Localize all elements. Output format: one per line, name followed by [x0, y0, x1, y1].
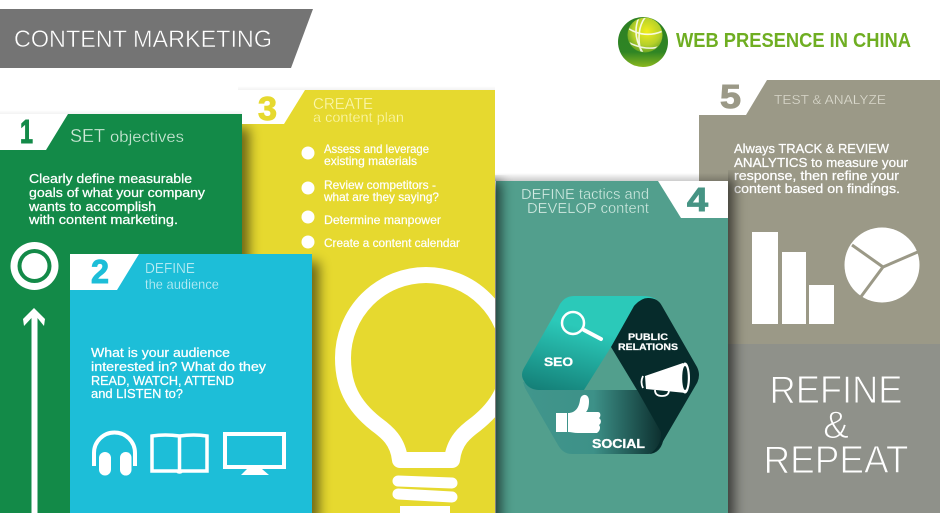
- panel: refine and repeat: REPEAT: [764, 439, 908, 482]
- arrow pointing up: [23, 308, 45, 513]
- panel 1: set objectives: [0, 110, 249, 513]
- number tab 2: 2: [91, 253, 109, 290]
- heading: define the audience: [145, 260, 219, 292]
- body text: objectives: [28, 171, 205, 227]
- body text: objectives: with content marketing.: [28, 212, 178, 227]
- heading: test and analyze: TEST & ANALYZE: [774, 92, 886, 107]
- heading: create: CREATE: [313, 96, 373, 113]
- body text: analytics: [734, 141, 909, 196]
- pie chart icon: [844, 228, 920, 302]
- number tab 4: [658, 181, 728, 218]
- heading: define the audience: DEFINE: [145, 260, 195, 277]
- panel 2: define the audience: [70, 253, 319, 513]
- bullet list: existing materials: [324, 154, 417, 168]
- icon: thumbs up: [556, 395, 601, 433]
- social band: [523, 382, 664, 454]
- label: public relations: PUBLIC: [628, 332, 668, 343]
- icon: target circle: [10, 242, 58, 290]
- panel: refine and repeat: REFINE: [770, 369, 902, 412]
- bullet list: Review competitors -: [324, 178, 436, 192]
- hexagon diagram: SEO, public relations, social: [522, 296, 699, 454]
- number tab 4: 4: [687, 181, 709, 218]
- icon: magnifying glass: [562, 312, 601, 339]
- body text: objectives: wants to accomplish: [28, 199, 156, 214]
- body text: objectives: goals of what your company: [29, 185, 205, 200]
- bullet list: [302, 142, 460, 250]
- heading: define tactics: [521, 186, 650, 217]
- number 5: 5: [720, 78, 741, 115]
- panel 5: test and analyze: [699, 78, 940, 513]
- number tab 1: [0, 113, 68, 150]
- logo: Web Presence in China: [618, 14, 911, 67]
- body text: audience: What is your audience: [91, 345, 230, 360]
- label: seo: SEO: [544, 355, 573, 369]
- label: public relations: RELATIONS: [618, 342, 678, 353]
- title banner: [0, 9, 313, 68]
- body text: analytics: ANALYTICS to measure your: [734, 155, 909, 170]
- icon: headphones: [94, 432, 135, 476]
- body text: objectives: Clearly define measurable: [29, 171, 192, 186]
- title banner: CONTENT MARKETING: [14, 26, 272, 53]
- icon: open book: [152, 435, 207, 472]
- bar chart icon: [752, 232, 834, 324]
- number tab 1: 1: [20, 113, 33, 150]
- number tab 3: [242, 90, 305, 127]
- heading: define tactics: DEFINE tactics and: [521, 186, 649, 203]
- panel 3: create a content plan: [238, 86, 509, 513]
- bullet list: Assess and leverage: [324, 142, 429, 156]
- label: public relations: [618, 332, 678, 353]
- body text: analytics: response, then refine your: [734, 168, 900, 183]
- body text: analytics: content based on findings.: [734, 181, 900, 196]
- heading: create: [313, 96, 404, 125]
- bullet list: what are they saying?: [323, 190, 439, 204]
- heading: define tactics: DEVELOP content: [527, 200, 650, 217]
- bullet list: Determine manpower: [324, 213, 441, 227]
- icon: lightbulb: [343, 275, 509, 513]
- seo band: [522, 296, 656, 390]
- body text: audience: READ, WATCH, ATTEND: [91, 373, 234, 388]
- body text: audience: [91, 345, 266, 401]
- heading: set objectives: [70, 126, 184, 146]
- number tab 3: 3: [258, 90, 277, 127]
- body text: audience: and LISTEN to?: [91, 386, 183, 401]
- body text: audience: interested in? What do they: [91, 359, 266, 374]
- logo: Web Presence in China: WEB PRESENCE IN CHINA: [676, 30, 911, 52]
- heading: set objectives: SET: [70, 126, 105, 146]
- heading: create: a content plan: [313, 109, 404, 125]
- public relations band: [611, 298, 699, 454]
- panel: refine and repeat: &: [823, 404, 849, 447]
- bullet list: Create a content calendar: [324, 236, 460, 250]
- heading: define the audience: the audience: [145, 276, 219, 292]
- panel: refine and repeat: [728, 344, 940, 513]
- body text: analytics: Always TRACK & REVIEW: [734, 141, 890, 156]
- icon: monitor: [225, 434, 284, 475]
- number tab 2: [70, 253, 139, 290]
- heading: set objectives: objectives: [110, 129, 184, 146]
- panel 4: define tactics and develop content: [495, 173, 734, 513]
- icon: megaphone: [642, 362, 690, 396]
- label: social: SOCIAL: [592, 436, 645, 451]
